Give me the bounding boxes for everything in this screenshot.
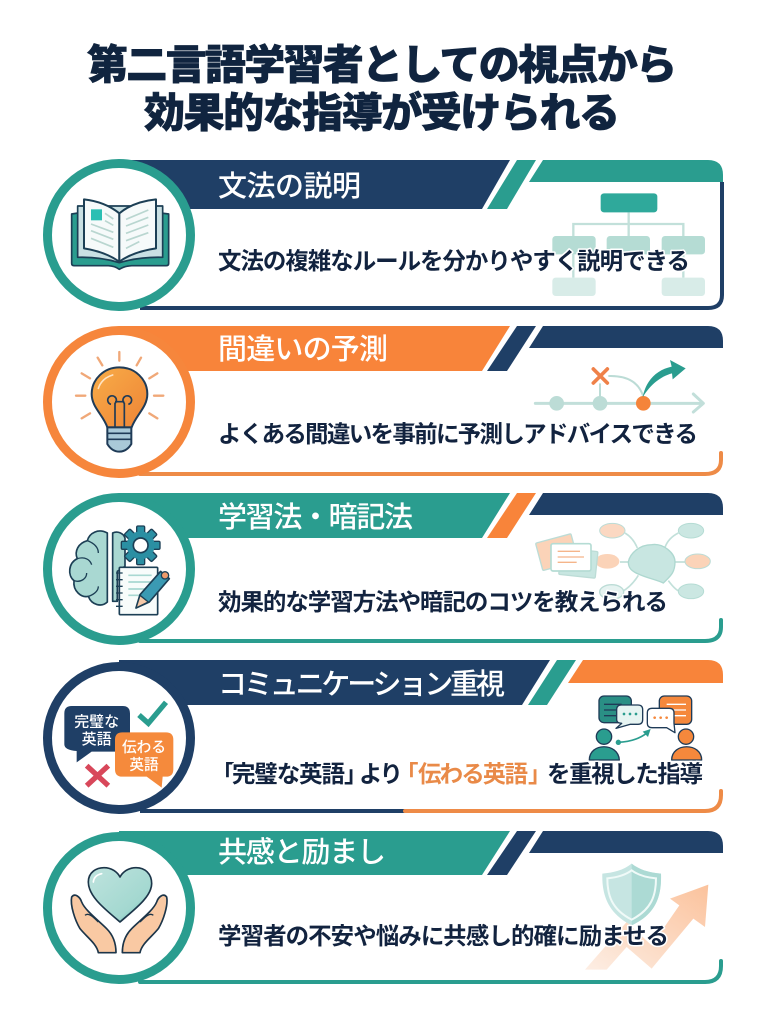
accent slash xyxy=(487,831,536,875)
illustration: org chart xyxy=(552,193,705,296)
title xyxy=(87,42,677,136)
icon: open book xyxy=(72,199,169,269)
accent slash xyxy=(528,660,576,705)
icon circle xyxy=(48,330,190,474)
description: 「 xyxy=(211,761,234,787)
title: 第二言語学習者としての視点から xyxy=(87,42,677,88)
right corner tab xyxy=(568,660,723,683)
right corner tab xyxy=(529,326,723,348)
header bar xyxy=(119,660,550,705)
panel border xyxy=(140,620,721,641)
panel border xyxy=(140,961,721,982)
description: 」 xyxy=(344,761,368,787)
icon circle xyxy=(48,836,190,980)
right corner tab xyxy=(529,160,723,182)
icon circle xyxy=(48,164,190,306)
header bar xyxy=(119,493,510,538)
description: よくある間違いを事前に予測しアドバイスできる xyxy=(218,421,698,447)
header bar xyxy=(119,326,510,371)
description: を重視した指導 xyxy=(547,761,703,787)
description xyxy=(211,761,703,787)
header label: 学習法・暗記法 xyxy=(218,501,413,534)
illustration: mind map and cards xyxy=(536,523,710,599)
description: 学習者の不安や悩みに共感し的確に励ませる xyxy=(218,923,669,949)
panel: grammar explanation xyxy=(48,160,723,308)
header bar xyxy=(119,831,510,875)
header label: 間違いの予測 xyxy=(218,333,388,366)
illustration: path with mistake xyxy=(535,360,703,412)
panel: study and memorization methods xyxy=(48,493,723,641)
description: 」 xyxy=(528,761,552,787)
header label: 共感と励まし xyxy=(218,836,386,869)
description: 「 xyxy=(395,761,418,787)
header label: コミュニケーション重視 xyxy=(218,668,505,701)
accent slash xyxy=(487,493,536,538)
description: より xyxy=(359,761,403,787)
accent slash xyxy=(487,326,536,371)
header bar xyxy=(119,160,510,209)
icon: speech bubbles comparison xyxy=(64,702,173,788)
icon: brain gear notebook pencil xyxy=(70,526,169,615)
description: 文法の複雑なルールを分かりやすく説明できる xyxy=(218,248,690,274)
icon: speech bubbles comparison: 英語 xyxy=(129,756,159,774)
panel: communication focus xyxy=(48,660,723,811)
panel border xyxy=(140,453,721,474)
illustration: two people in conversation xyxy=(589,696,702,760)
icon circle xyxy=(48,666,190,810)
right corner tab xyxy=(529,831,723,853)
accent slash xyxy=(487,160,536,209)
panel: predicting mistakes xyxy=(48,326,723,474)
header label: 文法の説明 xyxy=(218,170,361,203)
icon circle xyxy=(48,498,190,640)
description: 完璧な英語 xyxy=(232,761,345,787)
panel border xyxy=(140,791,721,811)
icon: heart in hands xyxy=(71,868,167,953)
right corner tab xyxy=(529,493,723,515)
icon: speech bubbles comparison: 英語 xyxy=(82,731,112,748)
panel: empathy and encouragement xyxy=(48,831,723,982)
icon: speech bubbles comparison: 伝わる xyxy=(122,739,166,756)
title: 効果的な指導が受けられる xyxy=(144,90,620,136)
description: 効果的な学習方法や暗記のコツを教えられる xyxy=(218,589,668,615)
icon: speech bubbles comparison: 完璧な xyxy=(74,713,119,730)
icon: light bulb xyxy=(76,352,163,452)
description: 伝わる英語 xyxy=(418,761,528,787)
illustration: shield and rising arrow xyxy=(585,864,708,970)
panel border xyxy=(140,182,722,308)
